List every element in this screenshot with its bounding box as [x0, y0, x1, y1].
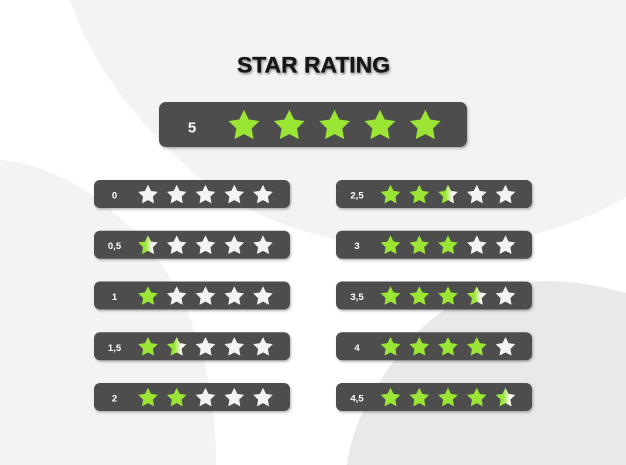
panel: rating 3: 3: [354, 241, 360, 252]
panel: rating 2,5: [336, 180, 532, 208]
panel: rating 3,5: [336, 282, 532, 310]
panel: rating 1: 1: [112, 292, 118, 303]
panel: rating 1,5: 1,5: [108, 343, 122, 354]
panel: rating 3: [336, 231, 532, 259]
panel: rating 0: 0: [112, 190, 117, 202]
panel: rating 0: [94, 180, 290, 208]
panel: rating 0,5: [94, 231, 290, 259]
panel: rating 2: [94, 383, 290, 411]
background shape: top blob: [70, 0, 626, 248]
panel: rating 4: 4: [354, 343, 360, 354]
label: 5: 5: [188, 120, 196, 136]
title: STAR RATING: [237, 52, 390, 78]
panel: rating 4: [336, 332, 532, 360]
panel: rating 0,5: 0,5: [108, 241, 122, 252]
background shape: left blob: [0, 160, 216, 465]
background shape: right blob: [347, 281, 626, 465]
panel: rating 1: [94, 282, 290, 310]
panel: rating 2: 2: [112, 394, 117, 404]
panel: rating 2,5: 2,5: [350, 190, 364, 202]
panel: rating 4,5: 4,5: [350, 394, 364, 404]
stars: 5 of 5: [229, 110, 441, 139]
panel: rating 4,5: [336, 383, 532, 411]
panel: rating 3,5: 3,5: [350, 292, 364, 303]
panel: rating 5: [159, 102, 467, 147]
panel: rating 1,5: [94, 332, 290, 360]
